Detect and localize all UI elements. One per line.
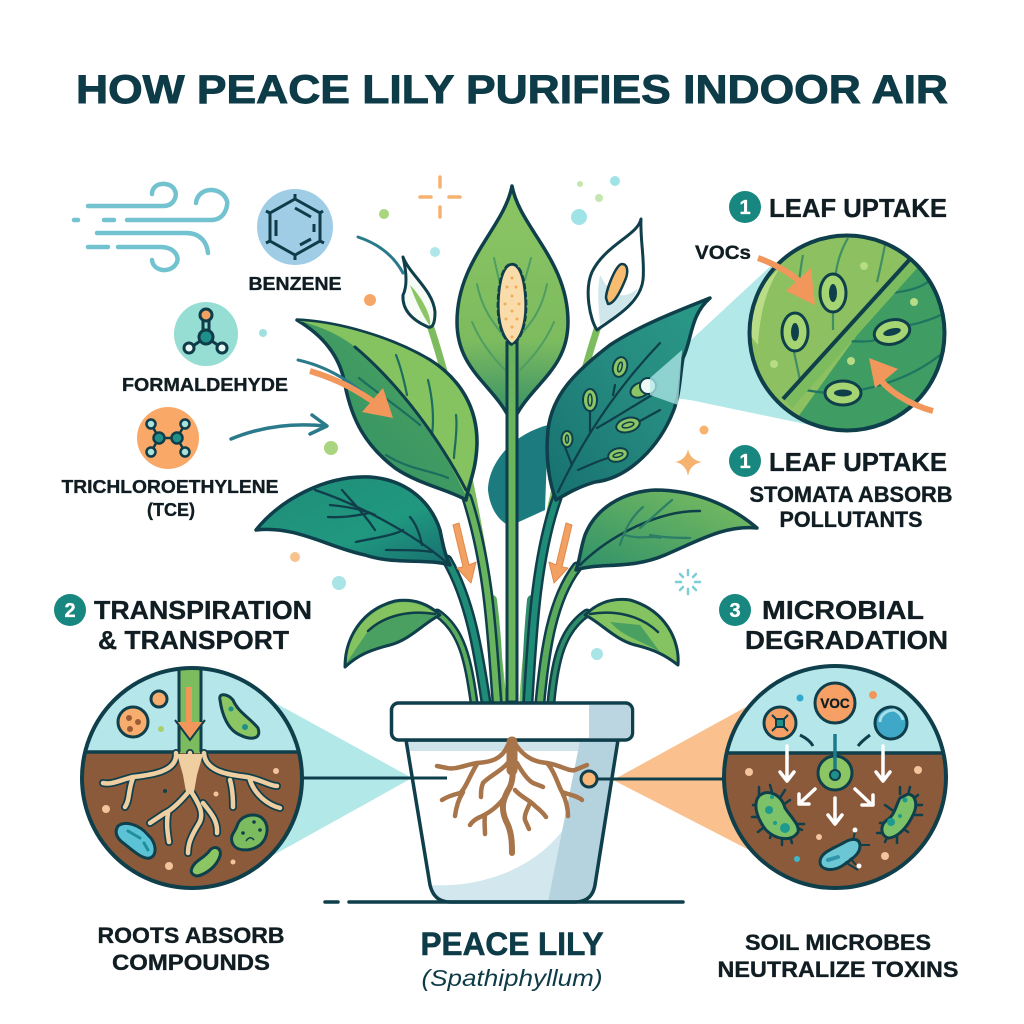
icon: benzene bbox=[257, 189, 333, 265]
heading: leaf uptake (top): 1 bbox=[739, 197, 751, 219]
bud: left bbox=[403, 257, 435, 327]
text: soil microbes neutralize toxins: SOIL MICROBES bbox=[745, 930, 931, 955]
soil specks bbox=[745, 766, 922, 860]
leaf: small right bbox=[585, 599, 678, 665]
text: roots absorb compounds: COMPOUNDS bbox=[112, 950, 270, 975]
label: trichloroethylene bbox=[62, 477, 278, 520]
heading: transpiration and transport: TRANSPIRATION bbox=[94, 595, 312, 625]
text: roots absorb compounds bbox=[98, 923, 284, 975]
heading: leaf uptake (top): LEAF UPTAKE bbox=[769, 193, 947, 223]
beam: microbes zoom bbox=[613, 702, 755, 853]
text: roots absorb compounds: ROOTS ABSORB bbox=[98, 923, 284, 948]
heading: microbial degradation: DEGRADATION bbox=[745, 625, 948, 655]
beam: roots zoom bbox=[270, 700, 412, 857]
arrow: lower leaf bbox=[869, 358, 933, 411]
icon: wind bbox=[74, 184, 227, 270]
title: HOW PEACE LILY PURIFIES INDOOR AIR bbox=[76, 68, 948, 112]
molecule bubble bbox=[764, 707, 796, 739]
bacterium blue bbox=[820, 828, 870, 870]
heading: transpiration and transport bbox=[54, 594, 312, 655]
text: stomata absorb pollutants: POLLUTANTS bbox=[780, 507, 922, 532]
panel: roots zoom bbox=[80, 665, 305, 892]
leaf: left big bbox=[297, 320, 477, 500]
heading: microbial degradation: MICROBIAL bbox=[762, 595, 924, 625]
leaf veins: lower right bbox=[580, 511, 700, 565]
label: trichloroethylene: TRICHLOROETHYLENE bbox=[62, 477, 278, 497]
arrow: VOCs into stomata bbox=[758, 258, 815, 305]
icon: formaldehyde bbox=[174, 302, 238, 366]
decorative dots and sparkles bbox=[259, 176, 708, 660]
text: soil microbes neutralize toxins bbox=[718, 930, 958, 982]
blue sphere bbox=[875, 707, 907, 739]
label: formaldehyde: FORMALDEHYDE bbox=[122, 375, 288, 395]
VOC bubble bbox=[815, 683, 855, 723]
beam overlay on leaf bbox=[650, 350, 682, 405]
center node bbox=[818, 756, 852, 790]
icon: trichloroethylene bbox=[137, 407, 199, 469]
panel: microbes zoom: VOC bbox=[820, 696, 850, 711]
bacterium left bbox=[752, 785, 804, 845]
ground line bbox=[325, 900, 683, 904]
label: VOCs: VOCs bbox=[695, 243, 751, 264]
heading: microbial degradation: 3 bbox=[729, 600, 741, 622]
bacteria in soil bbox=[116, 823, 155, 858]
white arrows bbox=[780, 746, 890, 824]
plant bbox=[256, 186, 757, 702]
label: benzene: BENZENE bbox=[248, 274, 342, 294]
leaf: left big light half bbox=[299, 321, 475, 494]
leaf veins: lower left bbox=[315, 490, 446, 562]
label: peace lily: (Spathiphyllum) bbox=[422, 965, 602, 991]
panel: microbes zoom bbox=[720, 660, 950, 893]
heading: leaf uptake (second): 1 bbox=[739, 451, 751, 473]
text: stomata absorb pollutants: STOMATA ABSORB bbox=[750, 482, 952, 507]
leaf side veins: lower right bbox=[620, 500, 690, 545]
leaf veins: center bbox=[472, 258, 554, 370]
panel: leaf uptake zoom bbox=[745, 230, 950, 435]
leaf: right big, stomata bbox=[547, 298, 710, 500]
pot bbox=[392, 703, 632, 905]
arrow: VOC into left leaf bbox=[298, 360, 393, 418]
arrow: down right bbox=[549, 523, 572, 583]
arrow: stem to benzene bbox=[358, 237, 403, 273]
soil specks bbox=[102, 768, 279, 870]
label: trichloroethylene: (TCE) bbox=[147, 500, 195, 520]
arrow: air flow to leaf bbox=[231, 415, 327, 439]
bacterium right bbox=[877, 787, 922, 843]
particles bbox=[118, 707, 148, 737]
heading: microbial degradation bbox=[719, 594, 948, 655]
arrow: down left bbox=[453, 523, 476, 583]
orange arrow in stem bbox=[175, 687, 205, 738]
connector lines bbox=[300, 778, 755, 779]
heading: leaf uptake (second): LEAF UPTAKE bbox=[769, 447, 947, 477]
leaf: small left bbox=[345, 600, 440, 667]
spadix bbox=[499, 265, 525, 344]
leaf: lower left bbox=[256, 477, 450, 565]
stems bbox=[430, 312, 603, 702]
stem: center bbox=[507, 342, 517, 702]
label: peace lily: PEACE LILY bbox=[420, 926, 604, 962]
roots dark outline bbox=[103, 753, 280, 853]
label: peace lily bbox=[420, 926, 604, 991]
text: stomata absorb pollutants bbox=[750, 482, 952, 532]
leaf: lower right bbox=[576, 490, 757, 570]
leaf: center bbox=[457, 186, 568, 424]
root crown bbox=[177, 754, 203, 792]
heading: transpiration and transport: 2 bbox=[64, 600, 76, 622]
pot roots bbox=[437, 742, 587, 853]
heading: transpiration and transport: & TRANSPORT bbox=[98, 625, 289, 655]
connector node bbox=[581, 771, 597, 787]
leaf veins: left big bbox=[355, 347, 466, 490]
text: soil microbes neutralize toxins: NEUTRALIZE TOXINS bbox=[718, 957, 958, 982]
beam: leaf zoom bbox=[650, 262, 810, 425]
leaf: dark back leaf bbox=[488, 425, 548, 526]
flower: right spathe bbox=[588, 219, 643, 330]
